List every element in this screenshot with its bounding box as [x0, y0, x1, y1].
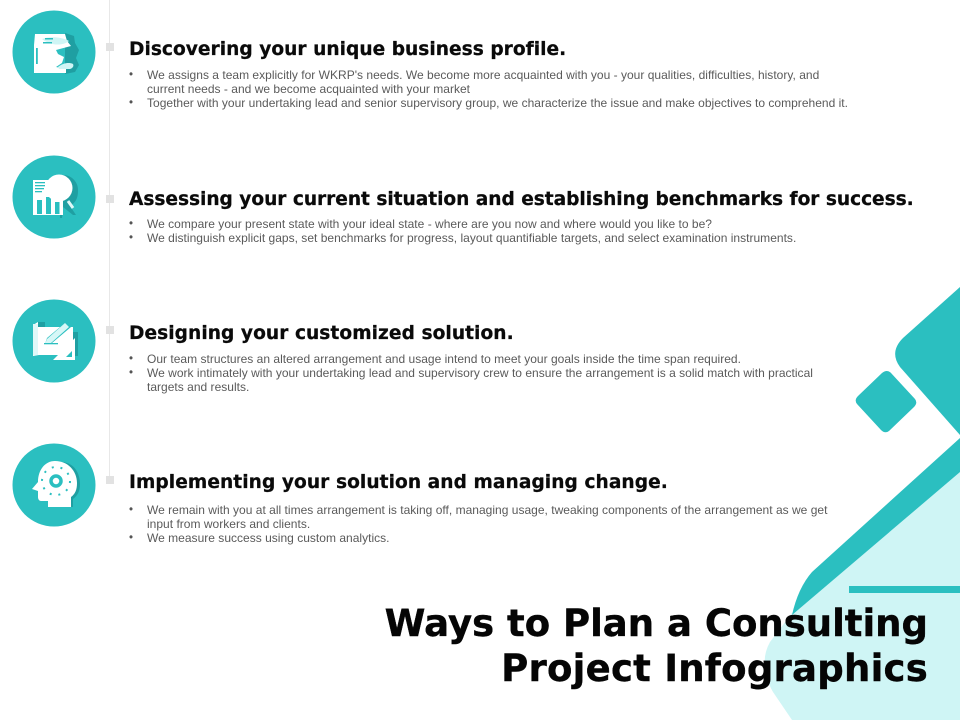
marker 2 [106, 195, 114, 203]
title: Ways to Plan a Consulting [385, 602, 928, 645]
icon: business profile [12, 10, 96, 94]
heading 3: Designing your customized solution. [129, 323, 514, 344]
section 4 bullets: We remain with you at all times arrangement is taking off, managing usage, tweaking components of the arrangement as we get [147, 503, 827, 517]
section 3 bullets: targets and results. [147, 380, 249, 394]
heading 2: Assessing your current situation and establishing benchmarks for success. [129, 189, 914, 210]
section 2 bullets: We compare your present state with your ideal state - where are you now and where would you like to be? [147, 217, 712, 231]
icon: head with gear [12, 444, 96, 526]
section 3 bullets: • [129, 367, 133, 379]
icon: assessment chart and magnifier [12, 156, 96, 238]
section 4 bullets: • [129, 532, 133, 544]
icon: blueprint and pencil [12, 300, 96, 382]
section 4 bullets [129, 503, 828, 545]
section 1 bullets: • [129, 97, 133, 109]
section 2 bullets: • [129, 218, 133, 230]
section 1 bullets [129, 68, 848, 110]
section 1 bullets: • [129, 69, 133, 81]
section 1 bullets: We assigns a team explicitly for WKRP's needs. We become more acquainted with you - your qualities, difficulties, history, and [147, 68, 819, 82]
section 2 bullets [129, 217, 796, 245]
section 3 bullets: We work intimately with your undertaking lead and supervisory crew to ensure the arrangement is a solid match with practical [147, 366, 813, 380]
heading 4: Implementing your solution and managing change. [129, 472, 668, 493]
section 3 bullets: • [129, 353, 133, 365]
marker 1 [106, 43, 114, 51]
title [385, 602, 928, 690]
section 4 bullets: input from workers and clients. [147, 517, 310, 531]
heading 1: Discovering your unique business profile. [129, 39, 566, 60]
section 1 bullets: current needs - and we become acquainted with your market [147, 82, 470, 96]
section 2 bullets: • [129, 232, 133, 244]
section 3 bullets: Our team structures an altered arrangement and usage intend to meet your goals inside the time span required. [147, 352, 741, 366]
section 3 bullets [129, 352, 813, 394]
section 1 bullets: Together with your undertaking lead and senior supervisory group, we characterize the issue and make objectives to comprehend it. [147, 96, 848, 110]
title: Project Infographics [501, 647, 928, 690]
marker 3 [106, 326, 114, 334]
section 2 bullets: We distinguish explicit gaps, set benchmarks for progress, layout quantifiable targets, and select examination instruments. [147, 231, 796, 245]
section 4 bullets: • [129, 504, 133, 516]
section 4 bullets: We measure success using custom analytics. [147, 531, 390, 545]
marker 4 [106, 476, 114, 484]
